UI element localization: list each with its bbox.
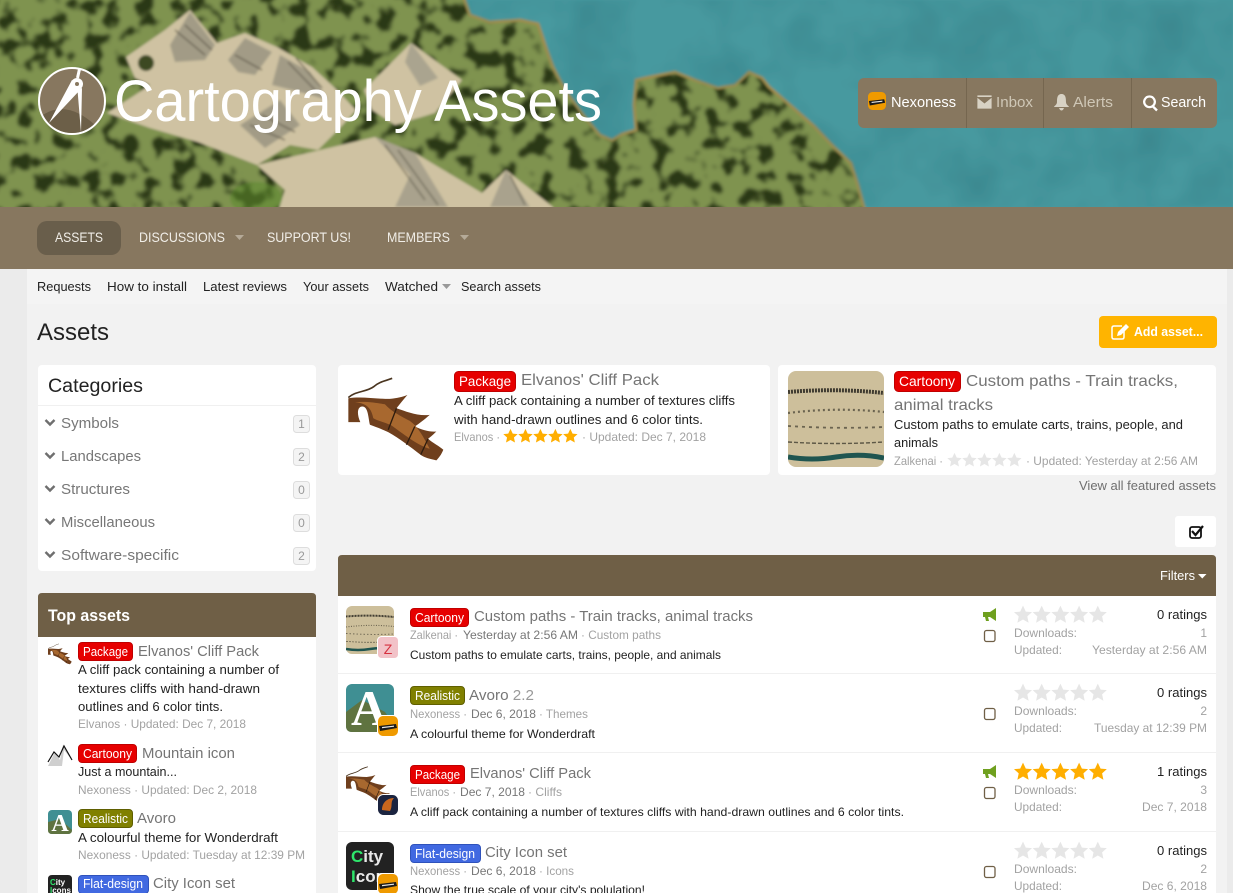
row: Elvanos' Cliff Pack: A cliff pack containing a number of textures cliffs with hand-drawn outlines and 6 color tints. [410,805,904,819]
top asset: Elvanos' Cliff Pack: Elvanos' Cliff Pack [138,643,259,660]
top asset: Avoro: A [51,811,69,837]
category: Miscellaneous [46,514,310,532]
meta with rating [454,429,706,444]
row: City Icon set: Dec 6, 2018 [1142,879,1207,893]
category: Software-specific: 2 [298,549,305,563]
top asset: Elvanos' Cliff Pack: Package [83,644,128,659]
button: add asset: Add asset... [1134,324,1203,339]
heading: categories: Categories [48,376,143,397]
row: City Icon set: City Icon set [485,844,568,861]
row: Custom paths: Yesterday at 2:56 AM [1092,643,1207,657]
category: Symbols [46,415,310,432]
panel: asset list [338,555,1216,893]
row: Custom paths: Yesterday at 2:56 AM [463,628,578,642]
row: Elvanos' Cliff Pack [346,763,1207,819]
row: Elvanos' Cliff Pack: 1 ratings [1157,764,1207,779]
description: with hand-drawn outlines and 6 color tints. [453,412,703,427]
asset title: Custom paths - Train tracks, [966,373,1178,390]
nav tab: Assets [37,221,121,255]
row: Avoro: · Themes [539,707,588,721]
badge: package: Package [459,373,511,389]
row: City Icon set: Flat-design [415,846,475,861]
image: paths [788,371,884,467]
menu item: Alerts: Alerts [1073,94,1113,111]
category: Software-specific: Software-specific [61,547,180,564]
row: City Icon set: Dec 6, 2018 [471,864,536,878]
row: Custom paths: Downloads: [1014,626,1077,640]
category: Miscellaneous: Miscellaneous [61,514,155,531]
badge: cartoony [894,372,960,392]
row: Avoro: Tuesday at 12:39 PM [1094,721,1207,735]
row: Elvanos' Cliff Pack: Dec 7, 2018 [460,785,525,799]
row: Elvanos' Cliff Pack: Updated: [1014,800,1062,814]
icon: envelope [977,95,992,109]
icon: bell [1054,94,1069,110]
row: Custom paths [346,606,1207,662]
description: Custom paths to emulate carts, trains, people, and [894,417,1183,432]
heading: top assets: Top assets [48,606,130,625]
category: Landscapes: Landscapes [61,448,141,465]
row: Custom paths: Custom paths - Train tracks, animal tracks [474,608,753,625]
row: City Icon set: Updated: [1014,879,1062,893]
row: Custom paths: 0 ratings [1157,607,1207,622]
menu item: Inbox: Inbox [996,94,1033,111]
featured card: Elvanos' Cliff Pack [338,365,770,475]
top asset: Avoro: Realistic [83,811,128,826]
row: City Icon set: 0 ratings [1157,843,1207,858]
description [894,417,1183,450]
top asset: Avoro [48,810,305,862]
row: Avoro: A colourful theme for Wonderdraft [410,727,596,741]
nav tab: Assets: ASSETS [55,229,103,245]
sub navigation: Requests [37,279,91,294]
meta with rating [894,453,1198,468]
row: Custom paths: Updated: [1014,643,1062,657]
category: Symbols: Symbols [61,415,119,432]
row: Custom paths: · Custom paths [581,628,661,642]
category: Software-specific [46,547,310,564]
nav tab: Support us: SUPPORT US! [267,229,351,245]
badge: cartoony: Cartoony [899,373,955,389]
meta with rating: Elvanos · [454,430,500,444]
top asset: City Icon set: City Icon set [153,875,236,892]
sub navigation: Latest reviews [203,279,288,294]
menu item: Nexoness: Nexoness [891,94,956,111]
meta with rating: Zalkenai · [894,454,943,468]
row: Elvanos' Cliff Pack: Elvanos' Cliff Pack [470,765,591,782]
top asset: Elvanos' Cliff Pack: textures cliffs with hand-drawn [78,681,260,696]
sub navigation: Watched [385,279,438,294]
top asset: Elvanos' Cliff Pack [48,642,279,731]
row: City Icon set: 2 [1200,862,1207,876]
row: Avoro: Avoro 2.2 [469,687,534,704]
row: Avoro: A [351,680,387,736]
top asset: City Icon set: City [50,878,66,887]
top asset: Avoro: Avoro [137,810,176,827]
asset title [894,373,1178,414]
avatar: Nexoness [868,92,886,110]
category: Landscapes [46,448,310,466]
site logo and title [39,68,602,140]
row: Avoro: Downloads: [1014,704,1077,718]
row: Custom paths: Custom paths to emulate carts, trains, people, and animals [410,648,721,662]
sub navigation [27,269,1227,304]
row: Elvanos' Cliff Pack: Downloads: [1014,783,1077,797]
description: animals [894,435,938,450]
sub navigation: How to install [107,279,187,294]
top asset: Mountain icon [48,744,257,797]
category: Symbols: 1 [298,417,305,431]
top asset: Elvanos' Cliff Pack: outlines and 6 color tints. [78,699,223,714]
menu item: Search: Search [1161,94,1206,111]
top asset: Avoro: Nexoness · Updated: Tuesday at 12:39 PM [78,848,305,862]
row: Avoro: Realistic [415,688,460,703]
top asset: City Icon set [48,875,236,893]
heading: top assets [38,593,316,637]
category: Miscellaneous: 0 [298,516,305,530]
row: Custom paths: Z [384,641,393,657]
meta with rating: · Updated: Yesterday at 2:56 AM [1026,454,1198,468]
row: Custom paths: Cartoony [415,610,464,625]
row: Avoro [346,680,1207,741]
row: Elvanos' Cliff Pack: Elvanos · [410,785,456,799]
row: Elvanos' Cliff Pack: Dec 7, 2018 [1142,800,1207,814]
row: City Icon set: Nexoness · [410,864,467,878]
asset title: animal tracks [894,397,993,414]
row: City Icon set [346,842,1207,893]
link: view all featured: View all featured assets [1079,478,1216,493]
top asset: Elvanos' Cliff Pack: A cliff pack containing a number of [78,662,279,677]
panel: categories [38,365,316,571]
row: Avoro: 0 ratings [1157,685,1207,700]
category: Structures [46,481,310,498]
sub navigation: Search assets [461,279,541,294]
row: Custom paths: Zalkenai · [410,628,458,642]
top asset: Mountain icon: Nexoness · Updated: Dec 2, 2018 [78,783,257,797]
row: Avoro: 2 [1200,704,1207,718]
category: Structures: Structures [61,481,130,498]
image: cliff [348,378,443,460]
icon: compass logo [39,68,105,140]
row: Elvanos' Cliff Pack: · Cliffs [528,785,562,799]
header map banner [0,0,1233,215]
user menu [858,78,1217,128]
button: select toggle [1175,516,1216,547]
nav tab: Discussions: DISCUSSIONS [139,229,225,245]
main navigation bar [0,207,1233,269]
title: Cartography Assets [114,69,602,134]
row: Avoro: Dec 6, 2018 [471,707,536,721]
row: City Icon set: Downloads: [1014,862,1077,876]
description: A cliff pack containing a number of textures cliffs [454,393,736,408]
category: Landscapes: 2 [298,450,305,464]
row: Custom paths: 1 [1200,626,1207,640]
row: Elvanos' Cliff Pack: Package [415,767,460,782]
row: Elvanos' Cliff Pack: 3 [1200,783,1207,797]
asset title: Elvanos' Cliff Pack [521,372,660,389]
row: City Icon set: Icons [351,867,395,886]
content column background [27,269,1227,893]
top asset: City Icon set: Flat-design [83,876,143,891]
row: City Icon set: City [351,847,384,866]
list header with filters [338,555,1216,596]
page heading: Assets [37,319,109,346]
row: Avoro: Nexoness · [410,707,467,721]
row: City Icon set: · Icons [539,864,574,878]
description [453,393,736,427]
row: Avoro: Updated: [1014,721,1062,735]
top asset: Elvanos' Cliff Pack: Elvanos · Updated: Dec 7, 2018 [78,717,246,731]
panel: top assets [38,593,316,893]
featured card: Custom paths [778,365,1216,475]
category: Structures: 0 [298,483,305,497]
top asset: Mountain icon: Just a mountain... [78,764,177,779]
sub navigation: Your assets [303,279,369,294]
nav tab: Members: MEMBERS [387,229,450,245]
top asset: Mountain icon: Cartoony [83,746,132,761]
top asset: Mountain icon: Mountain icon [142,745,235,762]
top asset: Avoro: A colourful theme for Wonderdraft [78,830,278,845]
list header with filters: Filters [1160,568,1195,583]
button: add asset [1099,316,1217,348]
icon: search [1144,96,1157,110]
meta with rating: · Updated: Dec 7, 2018 [582,430,706,444]
